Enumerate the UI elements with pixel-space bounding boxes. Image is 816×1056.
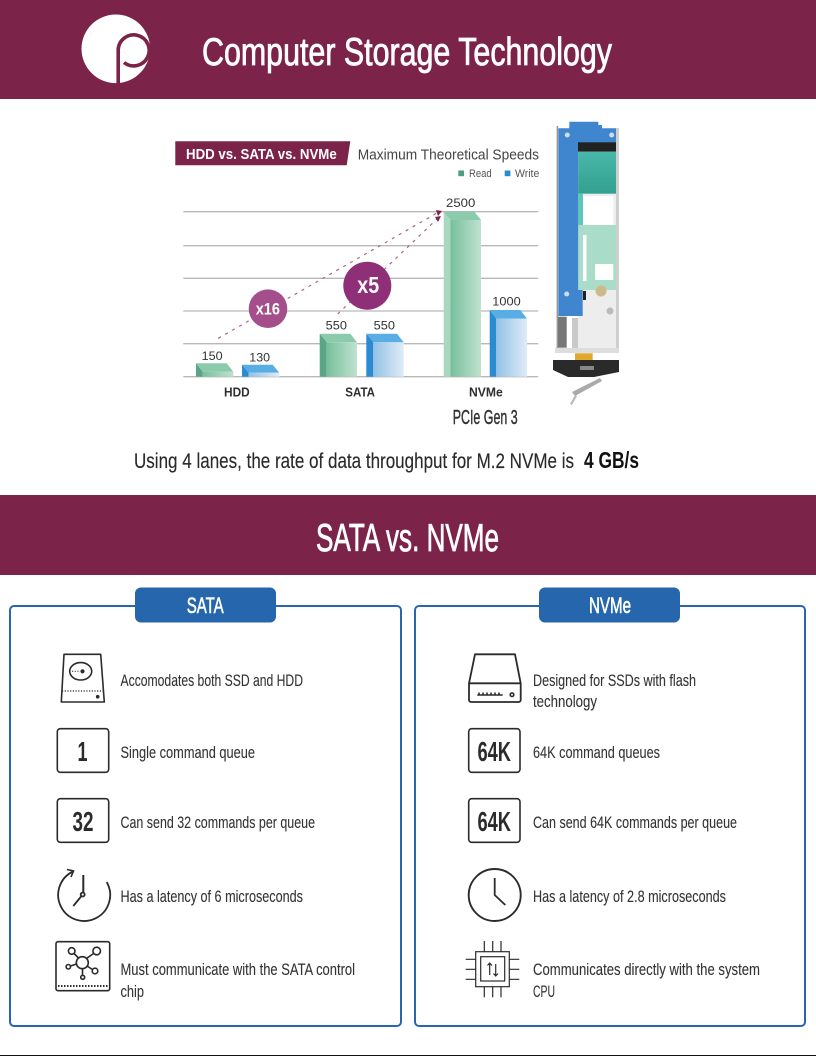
bar: HDD read (196, 363, 233, 377)
title: Computer Storage Technology (202, 31, 612, 74)
panel heading: SATA: SATA (187, 593, 224, 618)
bar: HDD write (242, 365, 279, 377)
text (533, 671, 696, 711)
icon: clock (469, 869, 521, 921)
value labels (202, 196, 521, 365)
panel heading: SATA (135, 588, 276, 622)
category labels: SATA (345, 385, 376, 400)
chart title badge: HDD vs. SATA vs. NVMe (186, 147, 337, 163)
text: Single command queue (120, 743, 255, 762)
legend (458, 168, 539, 180)
panel: NVMe (415, 588, 805, 1026)
text: Has a latency of 6 microseconds (120, 887, 303, 906)
panel heading: NVMe: NVMe (589, 593, 631, 618)
image: M.2 NVMe module (553, 122, 619, 405)
chart title badge (175, 141, 350, 165)
bar: NVMe read (444, 212, 481, 377)
dashed arrow: x5 (338, 216, 441, 314)
badge: x5 (343, 262, 391, 310)
icon: 64K: 64K (478, 736, 511, 767)
icon: 64K (469, 799, 520, 842)
text: Designed for SSDs with flash (533, 671, 696, 690)
text: Accomodates both SSD and HDD (120, 671, 303, 690)
text (120, 960, 355, 1001)
item: command queues (469, 729, 660, 772)
icon: hard drive (61, 654, 104, 702)
icon: number 32: 32 (72, 806, 94, 837)
legend: Read (469, 168, 492, 180)
text: Has a latency of 2.8 microseconds (533, 887, 726, 906)
icon: 64K: 64K (478, 806, 511, 837)
icon: 64K (469, 729, 520, 772)
bar: SATA read (320, 334, 357, 377)
item: SSD design (469, 654, 696, 711)
icon: number 1 (57, 729, 109, 772)
category labels: NVMe (469, 385, 503, 400)
item: latency (469, 869, 726, 921)
value labels: 130 (249, 351, 270, 365)
value labels: 2500 (446, 196, 476, 210)
value labels: 550 (326, 318, 347, 332)
data throughput statement: 4 GB/s (584, 447, 639, 473)
item: command queue (57, 729, 255, 772)
text: CPU (533, 982, 555, 1001)
PCIe label: PCIe Gen 3 (453, 407, 518, 429)
text: Can send 64K commands per queue (533, 813, 737, 832)
panel: SATA (10, 588, 401, 1026)
item: storage support (61, 654, 303, 702)
item: direct CPU (466, 941, 760, 1001)
text: Can send 32 commands per queue (120, 813, 315, 832)
text: 64K command queues (533, 743, 660, 762)
data throughput statement: Using 4 lanes, the rate of data throughput for M.2 NVMe is (134, 450, 574, 473)
chart subtitle: Maximum Theoretical Speeds (358, 147, 539, 163)
icon: CPU chip (466, 941, 519, 997)
text: technology (533, 692, 597, 711)
category labels: HDD (224, 385, 250, 400)
section band: SATA vs. NVMe (0, 495, 816, 575)
icon: number 1: 1 (78, 736, 88, 767)
dashed arrow: x16 (218, 210, 442, 338)
text: chip (120, 982, 144, 1001)
panel heading: NVMe (539, 588, 680, 622)
icon: network chip (56, 942, 110, 991)
bar: NVMe write (490, 310, 527, 377)
value labels: 1000 (492, 295, 521, 309)
item: latency (58, 870, 303, 921)
legend: Write (515, 168, 539, 180)
item: control chip (56, 942, 355, 1001)
item: commands per queue (57, 799, 315, 842)
section band: SATA vs. NVMe: SATA vs. NVMe (316, 517, 499, 560)
badge: x16: x16 (256, 300, 280, 318)
bar: SATA write (366, 334, 404, 377)
value labels: 150 (202, 349, 223, 363)
category labels (224, 385, 503, 400)
icon: number 32 (57, 799, 109, 842)
item: commands per queue (469, 799, 737, 842)
badge: x16 (249, 289, 287, 328)
icon: timer (58, 870, 110, 921)
header band (0, 0, 816, 99)
text (533, 960, 760, 1001)
bar chart: maximum theoretical speeds (175, 141, 539, 429)
icon: solid state drive (469, 654, 521, 702)
value labels: 550 (374, 318, 395, 332)
icon: company logo (82, 14, 150, 84)
badge: x5: x5 (357, 272, 379, 298)
text: Must communicate with the SATA control (120, 960, 355, 979)
